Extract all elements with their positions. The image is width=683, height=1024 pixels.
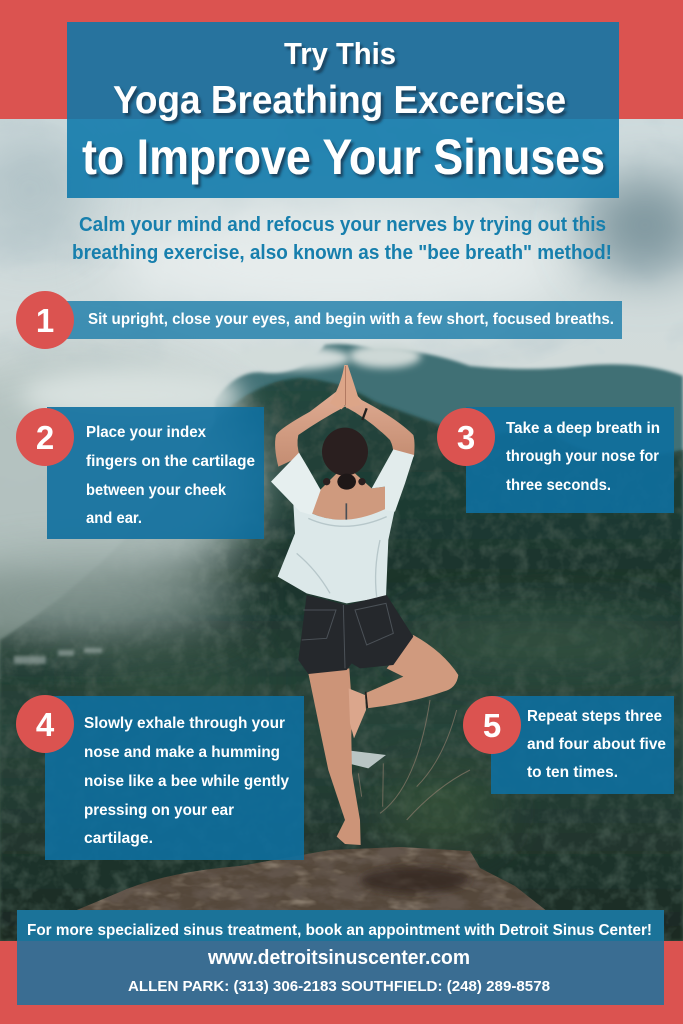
far teal ridge	[215, 344, 683, 560]
standing leg	[308, 668, 361, 845]
step 2: fingers on the cartilage	[86, 453, 255, 470]
dark forest mountain	[0, 378, 683, 941]
intro text: Calm your mind and refocus your nerves by trying out this	[79, 214, 606, 236]
step 2: between your cheek	[86, 482, 226, 499]
step 5: to ten times.	[527, 764, 618, 781]
website: www.detroitsinuscenter.com	[207, 947, 470, 969]
left mist	[0, 355, 260, 605]
spine tattoo	[344, 503, 349, 522]
title panel	[67, 22, 619, 198]
step 3	[437, 407, 674, 513]
step 5	[463, 696, 674, 794]
footer panel	[17, 910, 664, 1005]
arms	[275, 390, 345, 467]
rock	[77, 847, 546, 910]
back skin	[312, 473, 387, 520]
step 2: and ear.	[86, 510, 142, 527]
distant village	[14, 648, 102, 664]
step 1: Sit upright, close your eyes, and begin with a few short, focused breaths.	[88, 311, 614, 328]
step 2: Place your index	[86, 424, 206, 441]
denim shorts	[298, 595, 413, 674]
step 1	[16, 291, 622, 349]
shirt	[278, 503, 395, 603]
step 4	[16, 695, 304, 860]
step 2	[16, 407, 264, 539]
step 3: Take a deep breath in	[506, 420, 660, 437]
step 4: 4	[36, 706, 55, 743]
step 3: three seconds.	[506, 477, 611, 494]
bracelet	[362, 408, 367, 420]
footer call to action: For more specialized sinus treatment, book an appointment with Detroit Sinus Center!	[27, 922, 652, 939]
step 2: 2	[36, 419, 54, 456]
title: to Improve Your Sinuses: to Improve Your Sinuses	[82, 129, 605, 185]
top red band	[0, 0, 683, 119]
step 4: pressing on your ear	[84, 802, 234, 819]
woman in tree pose	[271, 365, 470, 845]
title: Yoga Breathing Excercise: Yoga Breathing Excercise	[113, 79, 566, 122]
bottom red band	[0, 941, 683, 1024]
title: Try This: Try This	[284, 36, 396, 71]
step 4: nose and make a humming	[84, 744, 280, 761]
hair	[322, 428, 368, 490]
raised leg	[365, 635, 458, 708]
step 5: and four about five	[527, 736, 666, 753]
step 1: 1	[36, 302, 54, 339]
branches	[358, 700, 470, 820]
step 4: cartilage.	[84, 830, 153, 847]
intro text: breathing exercise, also known as the "bee breath" method!	[72, 242, 612, 264]
raised foot	[349, 688, 366, 738]
step 3: through your nose for	[506, 448, 659, 465]
hut	[350, 751, 386, 768]
step 4: Slowly exhale through your	[84, 715, 285, 732]
intro text	[72, 214, 612, 264]
phone numbers: ALLEN PARK: (313) 306-2183 SOUTHFIELD: (248) 289-8578	[128, 978, 550, 995]
step 5: 5	[483, 707, 501, 744]
hands	[330, 365, 361, 409]
step 4: noise like a bee while gently	[84, 773, 289, 790]
step 5: Repeat steps three	[527, 708, 662, 725]
step 3: 3	[457, 419, 475, 456]
